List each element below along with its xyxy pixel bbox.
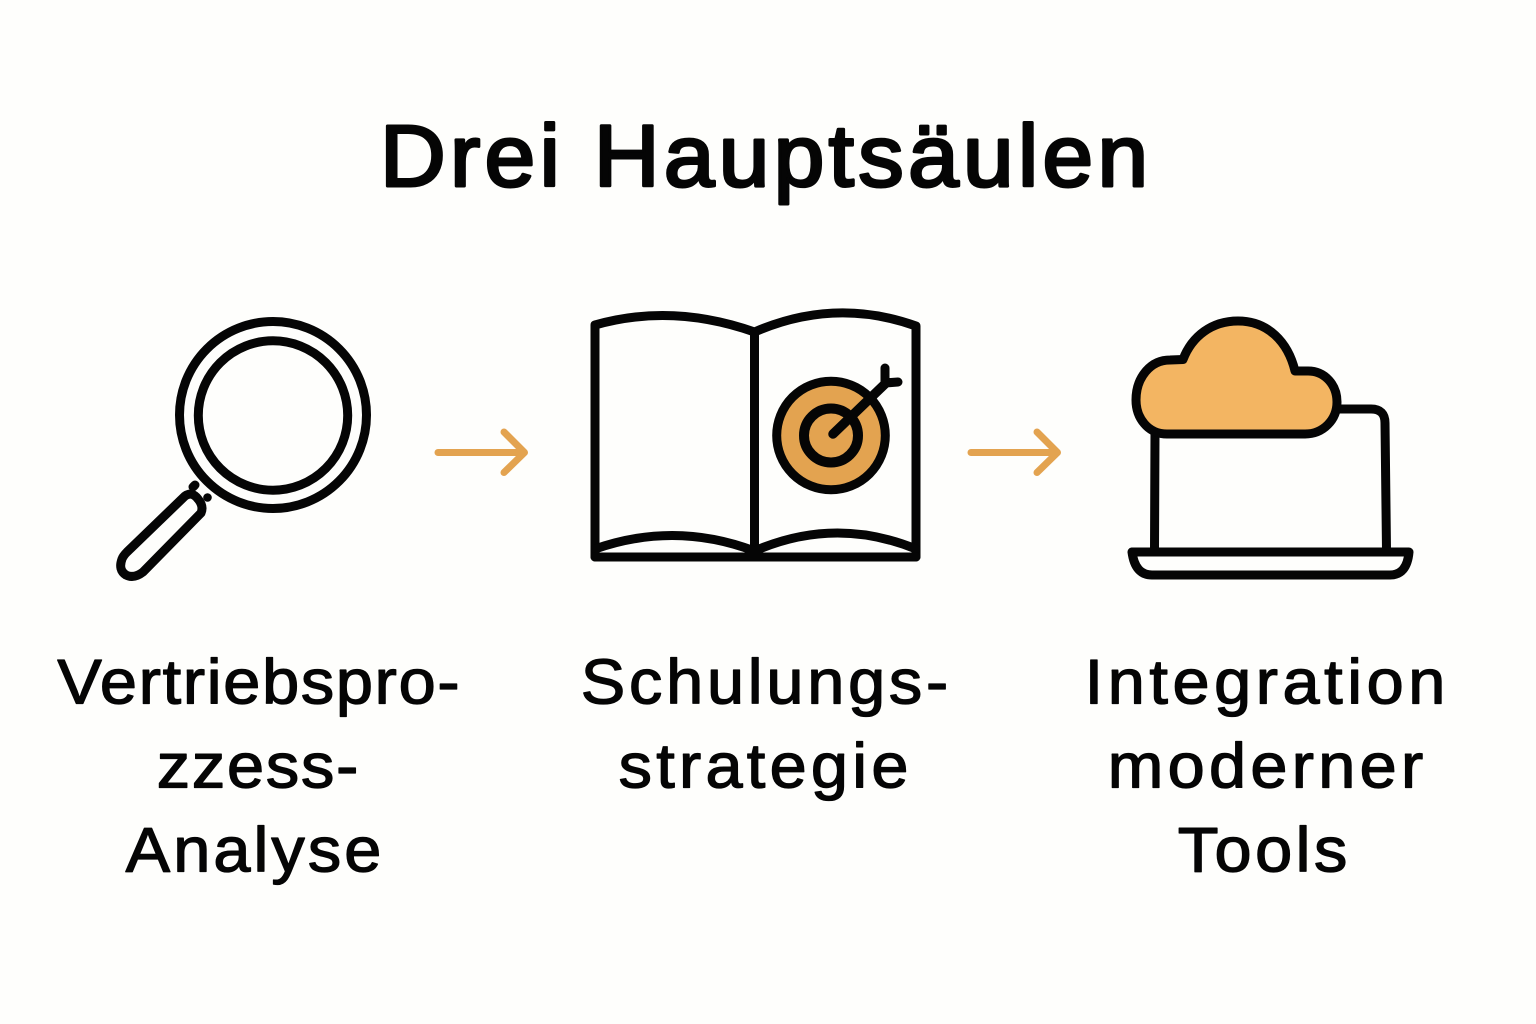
label: Vertriebsprozess-Analyse: zzess- [157, 730, 358, 801]
label: Vertriebsprozess-Analyse: Vertriebspro- [57, 646, 460, 717]
label: Integration moderner Tools: Integration [1085, 646, 1445, 717]
label: Schulungsstrategie [581, 646, 948, 801]
label: Vertriebsprozess-Analyse: Analyse [126, 814, 381, 885]
label: Integration moderner Tools: Tools [1178, 814, 1347, 885]
icon: magnifying glass [121, 322, 367, 576]
title: Drei Hauptsäulen [380, 107, 1148, 205]
icon: cloud [1136, 321, 1337, 434]
icon: target [777, 368, 898, 490]
icon: open book with target [595, 313, 916, 557]
label: Schulungsstrategie: strategie [619, 730, 908, 801]
arrow: first [438, 432, 524, 472]
label: Integration moderner Tools [1085, 646, 1445, 885]
arrow: second [971, 432, 1058, 472]
label: Schulungsstrategie: Schulungs- [581, 646, 948, 717]
label: Integration moderner Tools: moderner [1108, 730, 1423, 801]
icon: laptop with cloud [1132, 321, 1409, 575]
label: Vertriebsprozess-Analyse [57, 646, 460, 885]
